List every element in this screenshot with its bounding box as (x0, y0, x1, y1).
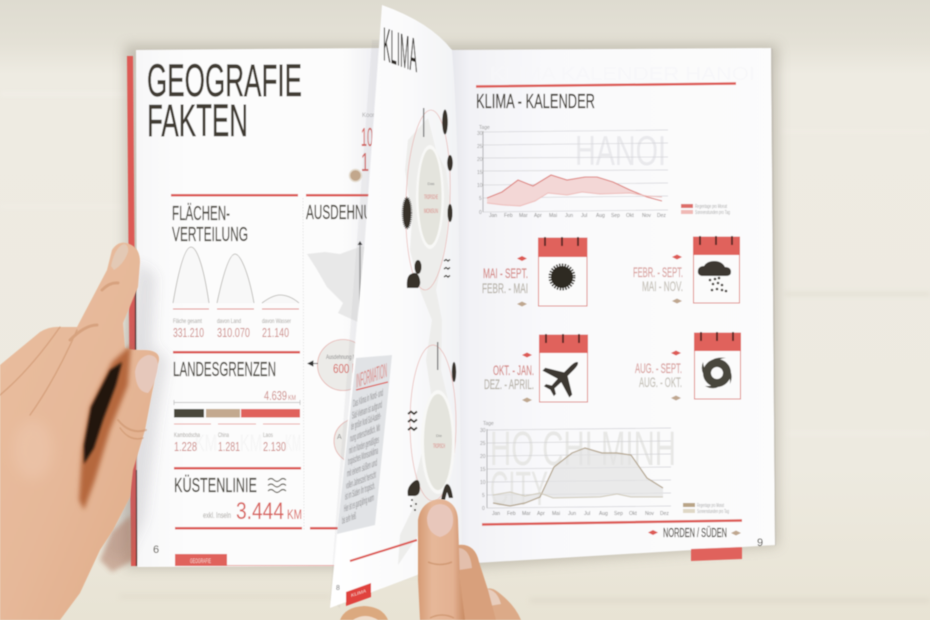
panel: Küstenlinie: 3.444 (236, 498, 284, 525)
circle: Ausdehnung 600 km: 600 k (333, 361, 357, 376)
left page: KM (285, 430, 301, 457)
index fingernail (111, 244, 128, 270)
legend: Regentage pro Monat (695, 204, 727, 210)
turned page: Klima flap: KLIMA (383, 16, 417, 83)
chart: Ho Chi Minh City (480, 421, 729, 517)
city watermark (490, 423, 676, 516)
panel: Küstenlinie: KM (287, 506, 302, 522)
border labels and values: Kambodscha (174, 432, 200, 439)
north-south arrow (359, 245, 361, 330)
month labels: Okt (626, 213, 634, 219)
circle: Ausdehnung 600 km (318, 340, 368, 390)
front finger creases (428, 562, 454, 618)
left hand (0, 243, 168, 620)
month labels: Dez (660, 511, 669, 517)
coordinates fragment: 10 (361, 122, 373, 152)
north diagram (402, 108, 453, 291)
label: rain months: MAI - NOV. (642, 278, 683, 294)
y axis labels: 25 (477, 144, 483, 150)
month labels: Okt (629, 511, 637, 517)
panel: Flächenverteilung: 331.210 (173, 325, 204, 340)
right hand fingers (340, 499, 521, 620)
month labels (492, 511, 669, 517)
month labels: Apr (534, 213, 542, 219)
footer tab (691, 547, 742, 561)
heading: AUSDEHNU (306, 202, 372, 224)
knuckle highlight (13, 420, 53, 480)
icon: sun (550, 265, 574, 289)
dark gap between fingers (84, 362, 122, 464)
legend: Sonnenstunden pro Tag (695, 210, 730, 216)
footer tab: Geografie: GEOGRAFIE (190, 559, 211, 565)
icon: airplane (535, 349, 591, 405)
faint mirrored print at top: KLIMA KALENDER HANOI (490, 64, 755, 84)
reddish gap shading (79, 345, 131, 510)
y axis labels (480, 421, 494, 512)
faint KM watermark: KM (240, 430, 262, 457)
icons: sun, storm and waves (408, 342, 456, 511)
calendar: plane (535, 334, 591, 405)
faint KM watermark (195, 430, 301, 457)
rain and sun area (487, 175, 662, 206)
panel: Landesgrenzen (173, 351, 301, 457)
turned page: Klima flap: tropisches Monsunklima (348, 446, 378, 468)
heading (172, 203, 248, 246)
label: plane months: OKT. - JAN. (493, 362, 534, 378)
month labels: Nov (645, 511, 654, 517)
front finger (418, 499, 465, 620)
month labels: Sep (614, 511, 623, 517)
month labels (489, 213, 666, 219)
city watermark: HO CHI MINH (490, 423, 676, 476)
arch chart (173, 247, 299, 303)
y axis labels: 0 (482, 506, 485, 512)
legend: Sonnenstunden pro Tag (697, 509, 729, 515)
footer tab: Geografie (175, 554, 227, 566)
heading: KÜSTENLINIE (174, 475, 257, 497)
chart: Hanoi (477, 125, 730, 219)
label: cyclone months: AUG. - OKT. (639, 374, 682, 390)
border labels and values: Laos (263, 432, 274, 439)
border bar (174, 409, 300, 418)
panel: Flächenverteilung: 310.070 (217, 325, 250, 340)
title: Geografie Fakten: GEOGRAFIE (147, 55, 302, 106)
climate labels: Das (427, 181, 435, 186)
icon: rain cloud (698, 261, 731, 292)
south diagram: TROPISCH (433, 444, 445, 450)
month labels: Feb (507, 511, 516, 517)
turned page: Klima flap: Hier ist es ganzjährig warm (344, 493, 374, 515)
y axis labels: Tage (483, 421, 494, 427)
month labels: Mai (552, 511, 560, 517)
border labels and values: China (218, 432, 229, 439)
flap footer tab (346, 583, 371, 606)
area labels and values: davon Land (217, 318, 241, 325)
y axis labels: 10 (477, 183, 483, 189)
y axis labels: 30 (477, 131, 483, 137)
flap page number: 8 (336, 585, 340, 592)
coordinates fragment: 1 (361, 147, 369, 177)
climate labels (424, 181, 438, 215)
y axis labels: 5 (482, 493, 485, 499)
rain and sun area (493, 448, 663, 506)
coordinates fragment (361, 113, 379, 177)
label: sun months (482, 256, 528, 306)
left page (127, 48, 380, 567)
label: cyclone months (635, 350, 682, 400)
month labels: Mai (549, 213, 557, 219)
panel: Landesgrenzen: 1.228 (174, 439, 197, 454)
icons: sun, cloud and waves (402, 108, 453, 288)
flap footer tab: KLIMA (351, 588, 367, 598)
panel: Landesgrenzen: 1.281 (218, 439, 240, 454)
legend: Norden / Süden (648, 525, 741, 540)
label: rain months (633, 254, 683, 304)
y axis labels: 30 (480, 428, 486, 434)
month labels: Aug (596, 213, 605, 219)
turned page: Klima flap: Süd-Vietnam ist aufgrund (352, 400, 382, 422)
north diagram: TROPISCHE (424, 195, 438, 201)
y axis labels: 15 (480, 467, 486, 473)
turned page: Klima flap (330, 5, 462, 608)
label: sun months: FEBR. - MAI (482, 280, 528, 296)
month labels: Jul (581, 213, 587, 219)
flap sheet (330, 5, 462, 608)
label: plane months (484, 352, 534, 402)
lower fingernail (353, 616, 378, 620)
month labels: Apr (537, 511, 545, 517)
climate ring (410, 345, 456, 501)
climate label: Die (436, 433, 443, 438)
panel: Küstenlinie (174, 467, 302, 530)
turned page: Klima flap: ist im Süden ihr tropisch. (345, 481, 375, 503)
label: rain months: FEBR. - SEPT. (633, 264, 683, 280)
red book spine (127, 56, 137, 566)
front fingernail (427, 504, 453, 537)
turned page: Klima flap: vollen Jahreszeit herrscht (346, 470, 376, 492)
flap shadow on left page (330, 40, 392, 608)
month labels: Sep (611, 213, 620, 219)
y axis labels: 15 (477, 170, 483, 176)
month labels: Feb (504, 213, 513, 219)
y axis labels: 25 (480, 441, 486, 447)
month labels: Mar (522, 511, 531, 517)
panel: Ausdehnung (306, 194, 378, 530)
month labels: Jan (492, 511, 500, 517)
panel: Flächenverteilung (171, 194, 299, 340)
third finger (485, 588, 521, 620)
icon: waves (268, 478, 286, 492)
calendar: cyclone (694, 332, 741, 399)
legend: Regentage pro Monat (697, 503, 724, 509)
y axis labels: Tage (479, 125, 490, 131)
border labels and values (174, 432, 274, 439)
footer rule (482, 520, 742, 524)
turned page: Klima flap: Das Klima in Nord- und (353, 388, 383, 410)
heading: Klima-Kalender: KLIMA - KALENDER (476, 91, 595, 113)
y axis labels: 5 (479, 196, 482, 202)
south diagram (408, 342, 456, 511)
y axis labels: 20 (480, 454, 486, 460)
month labels: Jul (584, 511, 590, 517)
panel: Landesgrenzen: 2.130 (263, 439, 286, 454)
area labels and values: Fläche gesamt (173, 318, 202, 325)
flap footer rule (350, 540, 417, 561)
information body text: bis sehr heiß (342, 511, 356, 527)
calendar: sun (538, 237, 587, 306)
turned page: Klima flap: nung unterschiedlich. Mit (350, 423, 380, 445)
heading: LANDESGRENZEN (173, 359, 276, 381)
back finger (458, 545, 496, 620)
grid (483, 130, 668, 212)
page number 6: 6 (153, 544, 159, 556)
legend (681, 204, 730, 216)
turned page: Klima flap: mit im Norden gemäßigtes (349, 435, 379, 457)
turned page: Klima flap: mit einem süßen und (347, 458, 377, 480)
month labels: Mar (519, 213, 528, 219)
climate ring (403, 109, 453, 291)
y axis labels: 20 (477, 157, 483, 163)
label: sun months: MAI - SEPT. (483, 265, 528, 281)
calendar: rain (693, 236, 740, 303)
faint KM watermark: KM (195, 430, 217, 457)
information body text (342, 388, 383, 527)
dotted divider (303, 198, 304, 530)
back fingernail (459, 548, 472, 570)
heading: FLÄCHEN- (172, 203, 230, 225)
turned page: Klima flap: INFORMATION (356, 359, 387, 393)
circle: lower distance (334, 419, 378, 463)
panel: Ausdehnung: A (337, 434, 342, 441)
month labels: Nov (642, 213, 651, 219)
label: cyclone months: AUG. - SEPT. (635, 360, 682, 376)
legend (683, 503, 729, 515)
grid (487, 428, 671, 508)
heading: VERTEILUNG (172, 224, 248, 246)
title: Geografie Fakten: FAKTEN (147, 95, 248, 146)
month labels: Jun (568, 511, 576, 517)
month labels: Aug (599, 511, 608, 517)
total length: 4.639 (264, 388, 287, 403)
circle: Ausdehnung 600 km: Ausdehnung N (326, 354, 356, 361)
finger creases (0, 283, 146, 439)
lower finger (340, 606, 388, 620)
y axis labels (477, 125, 490, 216)
map on flap (398, 118, 452, 565)
month labels: Dez (657, 213, 666, 219)
west arrow (308, 361, 318, 366)
panel: Landesgrenzen: KM (288, 395, 296, 402)
label: plane months: DEZ. - APRIL. (484, 376, 534, 392)
tan marker dot (350, 170, 362, 182)
hand shadow (105, 262, 168, 560)
Hanoi watermark: HANOI (575, 127, 666, 174)
shadow under wrist (100, 515, 134, 572)
third fingernail (487, 589, 501, 606)
page number 9: 9 (757, 537, 763, 549)
climate labels: MONSUN (424, 209, 438, 215)
turned page: Klima flap: der großen Nord-Süd-Ausdeh- (351, 411, 381, 433)
map of Vietnam (307, 246, 372, 326)
book shadow (125, 45, 778, 568)
page sheet (446, 48, 775, 564)
panel: Flächenverteilung: 21.140 (262, 325, 289, 340)
climate label (433, 433, 445, 450)
month labels: Jun (565, 213, 573, 219)
page sheet (136, 48, 380, 567)
legend: Norden / Süden: NORDEN / SÜDEN (663, 525, 727, 540)
title: Geografie Fakten (147, 55, 302, 146)
y axis labels: 0 (479, 210, 482, 216)
coordinates fragment: Koordi (362, 113, 379, 119)
heading rule (476, 84, 736, 86)
icon: cyclone (702, 358, 732, 388)
city watermark: CITY (490, 463, 548, 516)
panel: Information (337, 355, 392, 534)
right page (446, 48, 776, 564)
y axis labels: 10 (480, 480, 486, 486)
middle fingernail (135, 355, 158, 393)
fingers and palm (0, 243, 159, 620)
coastline value: exkl. Inseln (203, 511, 231, 520)
area labels and values (173, 318, 292, 325)
month labels: Jan (489, 213, 497, 219)
area labels and values: davon Wasser (262, 318, 292, 325)
